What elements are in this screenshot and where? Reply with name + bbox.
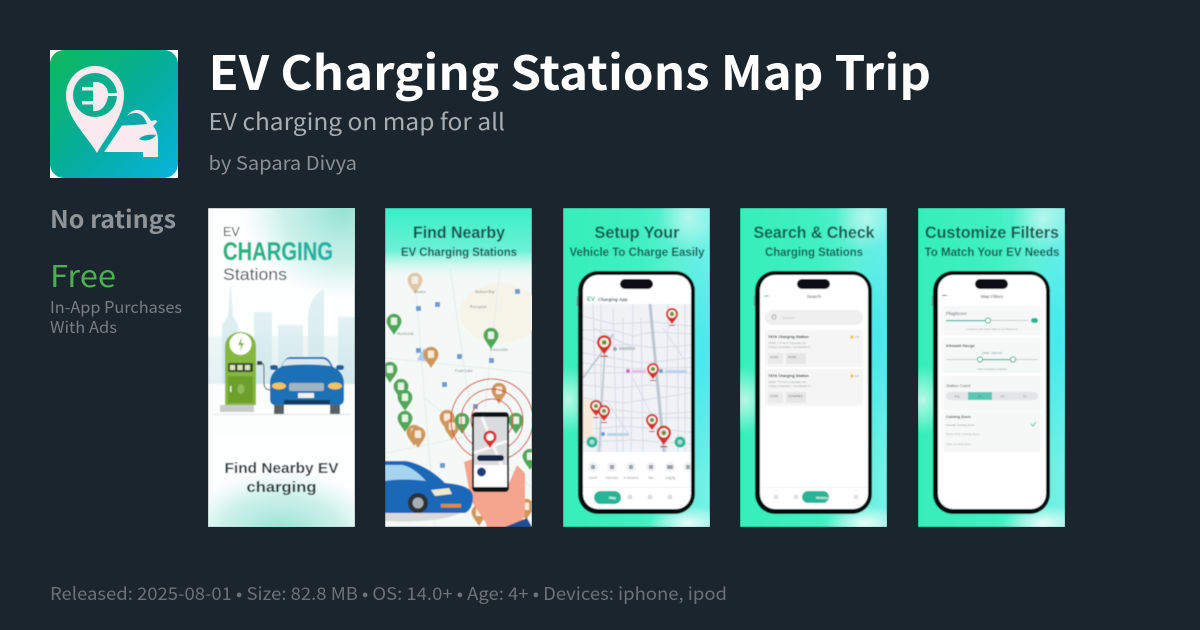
map details: Kaston — [415, 290, 426, 295]
station card 2: College Grassland, Vermilastah R... — [768, 384, 813, 388]
heading: EV CHARGING Stations: Stations — [223, 266, 287, 284]
Coming soon card: Hide Coming Soon — [946, 442, 972, 446]
heading: Vehicle To Charge Easily — [570, 245, 705, 259]
Station count card: Any — [954, 394, 960, 398]
phone mockup: Amenities — [606, 476, 619, 480]
heading: Customize Filters — [925, 224, 1059, 242]
map details: Hudson Bay — [475, 290, 495, 295]
phone mockup — [576, 271, 695, 514]
phone mockup: Map — [609, 496, 616, 500]
station card 1: 4.8 — [855, 335, 859, 339]
screenshot 1: EV charging stations — [208, 208, 355, 527]
PlugScore card: PlugScore — [946, 311, 967, 316]
screenshot 4: search and check — [740, 208, 887, 527]
PlugScore card — [943, 306, 1041, 335]
purchase notes: In-App Purchases — [50, 294, 182, 318]
station card 1: CCS2 — [770, 355, 778, 359]
map details: Humboldt — [397, 332, 414, 337]
Station count card: 6+ — [1023, 394, 1027, 398]
Kilowatt range card: Fast charging enabled — [977, 367, 1007, 371]
map details — [385, 268, 540, 527]
search bar — [765, 310, 863, 325]
car — [385, 461, 473, 522]
Kilowatt range card: 22kW - 350+kW — [982, 351, 1002, 355]
map — [583, 304, 691, 452]
phone mockup: Search — [782, 315, 795, 320]
red pins — [597, 335, 611, 357]
phone — [472, 412, 509, 492]
categories — [583, 452, 691, 487]
subtitle: EV charging on map for all — [208, 103, 505, 137]
heading — [754, 223, 875, 259]
phone mockup: Ev Network — [624, 476, 639, 480]
station card 2: TATA Charging Station — [768, 374, 809, 378]
charger — [220, 332, 270, 412]
app header: EV — [587, 297, 595, 303]
caption — [224, 460, 338, 496]
heading — [924, 226, 1060, 256]
heading: Charging Stations — [765, 245, 863, 259]
pins — [382, 273, 538, 526]
station card 1: JANKI, T P No 5, Opposite Sci — [768, 341, 806, 345]
phone mockup: Rail — [649, 476, 654, 480]
Kilowatt range card: Kilowatt Range — [946, 343, 976, 348]
phone mockup: Map Filters — [981, 294, 1004, 299]
map details: Preeceville — [490, 348, 508, 353]
station card 1: CCS2 — [788, 355, 796, 359]
Coming soon card: Include Coming Soon — [946, 423, 975, 427]
screenshot 2: find nearby — [382, 208, 540, 527]
signal rings — [451, 379, 533, 461]
station card 2 — [765, 369, 863, 406]
map details: Foam Lake — [455, 369, 473, 374]
Station count card: 2+ — [978, 394, 982, 398]
heading: To Match Your EV Needs — [924, 245, 1060, 259]
phone mockup: Lodging — [665, 476, 676, 480]
purchase notes: With Ads — [50, 314, 117, 338]
phone mockup — [932, 271, 1050, 514]
screenshot 5: customize filters — [918, 208, 1065, 527]
icon: car behind pin — [104, 110, 158, 157]
price: Free — [50, 252, 116, 296]
screenshot 3: setup vehicle — [563, 208, 710, 527]
heading: EV CHARGING Stations — [223, 225, 333, 284]
caption: charging — [246, 479, 316, 496]
bottom nav — [583, 487, 691, 488]
phone mockup: Search — [807, 294, 822, 299]
Station count card: 4+ — [1001, 394, 1005, 398]
map labels — [601, 347, 687, 436]
heading: EV Charging Stations — [401, 245, 517, 259]
PlugScore card: Locations will not be filtered by PlugScore — [966, 327, 1018, 331]
title: EV Charging Stations Map Trip — [208, 35, 931, 104]
station card 1: TATA Charging Station — [768, 335, 809, 339]
station card 2: JANKI, T P No 5, Opposite Sci — [768, 380, 806, 384]
heading: EV CHARGING Stations: EV — [223, 225, 240, 239]
hand — [464, 459, 525, 527]
ratings: No ratings — [50, 200, 176, 235]
Station count card — [943, 376, 1041, 411]
bottom nav — [760, 487, 868, 488]
Coming soon card: Coming Soon — [946, 415, 971, 419]
caption: Find Nearby EV — [224, 460, 338, 477]
Coming soon card: Show Only Coming Soon — [946, 432, 980, 436]
icon: app logo — [50, 50, 178, 178]
station card 1: College Grassland, Vermilastah R... — [768, 345, 813, 349]
phone mockup: Charging App — [598, 297, 628, 302]
car — [270, 357, 344, 415]
station card 2: CCS2 — [770, 394, 778, 398]
phone mockup — [754, 271, 872, 514]
phone mockup: History — [816, 496, 828, 500]
phone mockup: Search — [589, 476, 598, 480]
station card 2: 4.8 — [855, 374, 859, 378]
station card 2: CCS2/NLC — [788, 394, 804, 398]
heading — [401, 223, 517, 259]
map action buttons — [586, 436, 598, 448]
heading: Setup Your — [594, 223, 680, 242]
footer metadata: Released: 2025-08-01 • Size: 82.8 MB • OS: 14.0+ • Age: 4+ • Devices: iphone, ipod — [50, 581, 727, 606]
Station count card: Station Count — [946, 383, 971, 388]
purchase notes — [50, 294, 182, 338]
developer: by Sapara Divya — [208, 149, 357, 176]
skyline — [208, 286, 355, 385]
icon: map pin with plug — [66, 66, 124, 153]
map details: Porcupine — [470, 305, 487, 310]
heading: Find Nearby — [413, 223, 506, 242]
station card 1 — [765, 330, 863, 367]
heading — [570, 223, 705, 259]
Kilowatt range card — [943, 338, 1041, 373]
Coming soon card — [943, 412, 1041, 452]
heading: Search & Check — [754, 223, 875, 242]
heading: EV CHARGING Stations: CHARGING — [223, 238, 333, 266]
